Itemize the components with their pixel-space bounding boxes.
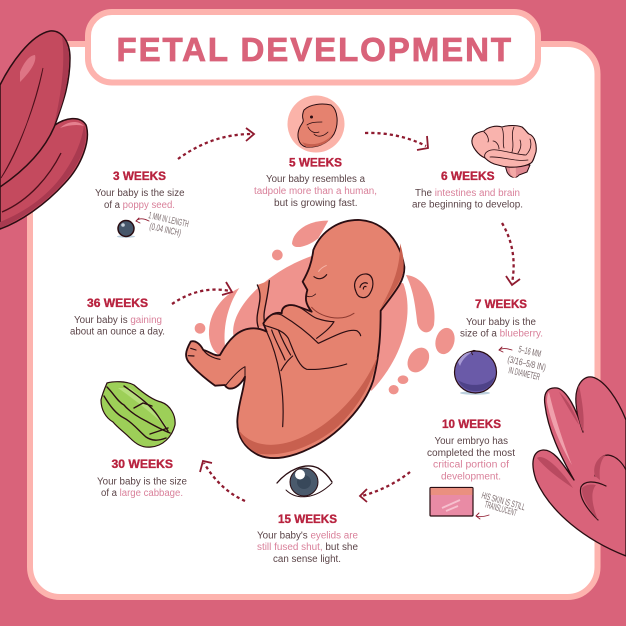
step: 36 weeks: about an ounce a day.	[70, 326, 165, 338]
decoration: bottom-right leaves	[533, 377, 626, 556]
step: 6 weeks: are beginning to develop.	[412, 200, 523, 210]
note: skin: HIS SKIN IS STILL	[480, 490, 526, 513]
step: 6 weeks	[412, 126, 536, 210]
step: 6 weeks: The intestines and brain	[415, 188, 520, 199]
step: 10 weeks	[427, 417, 526, 519]
body shading	[239, 243, 404, 454]
arrow: 3 to 5 weeks	[178, 128, 254, 159]
step: 3 weeks	[95, 169, 190, 239]
arrow: 15 to 30 weeks	[200, 461, 245, 501]
step: 10 weeks: completed the most	[427, 448, 515, 459]
step: 15 weeks	[257, 466, 358, 565]
icon: translucent skin	[430, 488, 473, 516]
icon: embryo	[288, 96, 344, 152]
step: 15 weeks: Your baby's eyelids are	[257, 530, 358, 542]
note: poppy seed size: (0.04 INCH)	[148, 221, 182, 239]
step: 10 weeks: critical portion of	[433, 460, 509, 470]
step: 6 weeks: 6 WEEKS	[441, 169, 494, 183]
face and limb lines	[188, 274, 373, 427]
central fetus illustration	[186, 220, 457, 458]
step: 10 weeks: development.	[441, 472, 501, 482]
step: 5 weeks: Your baby resembles a	[266, 174, 365, 185]
step: 30 weeks: Your baby is the size	[97, 476, 187, 488]
step: 5 weeks	[254, 96, 377, 209]
step: 3 weeks: Your baby is the size	[95, 188, 185, 199]
step: 36 weeks: Your baby is gaining	[74, 315, 162, 326]
step: 36 weeks: 36 WEEKS	[87, 296, 148, 310]
step: 36 weeks	[70, 296, 165, 338]
step: 7 weeks: size of a blueberry.	[460, 328, 543, 340]
title banner	[88, 12, 538, 82]
note: poppy seed size: 1 MM IN LENGTH	[147, 210, 190, 230]
amniotic background shapes	[195, 221, 457, 394]
step: 7 weeks: 7 WEEKS	[475, 297, 527, 311]
step: 15 weeks: still fused shut, but she	[257, 542, 358, 553]
note: blueberry size: IN DIAMETER	[507, 365, 541, 383]
icon: eye	[277, 466, 332, 497]
arrow: 6 to 7 weeks	[502, 223, 520, 285]
step: 7 weeks: Your baby is the	[466, 317, 536, 328]
umbilical cord	[257, 281, 269, 327]
note: blueberry size: 5–16 MM	[517, 344, 542, 360]
step: 3 weeks: 3 WEEKS	[113, 169, 166, 183]
step: 7 weeks	[454, 297, 547, 395]
icon: blueberry	[454, 350, 496, 395]
step: 30 weeks	[97, 382, 187, 499]
fetus body	[186, 220, 404, 458]
step: 5 weeks: 5 WEEKS	[289, 156, 342, 170]
icon: poppy seed	[117, 220, 135, 238]
arrow: 5 to 6 weeks	[365, 133, 428, 150]
step: 3 weeks: of a poppy seed.	[104, 200, 175, 211]
note: poppy seed size	[136, 210, 190, 239]
step: 10 weeks: 10 WEEKS	[442, 417, 501, 431]
step: 30 weeks: of a large cabbage.	[101, 488, 183, 499]
arrow: 30 to 36 weeks	[172, 282, 232, 304]
step: 30 weeks: 30 WEEKS	[112, 457, 173, 471]
step: 5 weeks: tadpole more than a human,	[254, 186, 377, 197]
icon: cabbage	[101, 382, 175, 447]
icon: brain	[472, 126, 536, 178]
arrow: 10 to 15 weeks	[360, 472, 410, 502]
note: skin: TRANSLUCENT	[483, 499, 518, 519]
note: blueberry size	[499, 344, 547, 383]
title: FETAL DEVELOPMENT	[116, 31, 511, 68]
step: 5 weeks: but is growing fast.	[274, 198, 358, 209]
decoration: top-left leaves	[0, 31, 87, 229]
note: skin	[476, 490, 526, 519]
step: 15 weeks: 15 WEEKS	[278, 512, 337, 526]
step: 10 weeks: Your embryo has	[434, 436, 508, 447]
ear	[355, 274, 373, 298]
step: 15 weeks: can sense light.	[273, 554, 341, 565]
note: blueberry size: (3/16–5/8 IN)	[506, 354, 547, 374]
